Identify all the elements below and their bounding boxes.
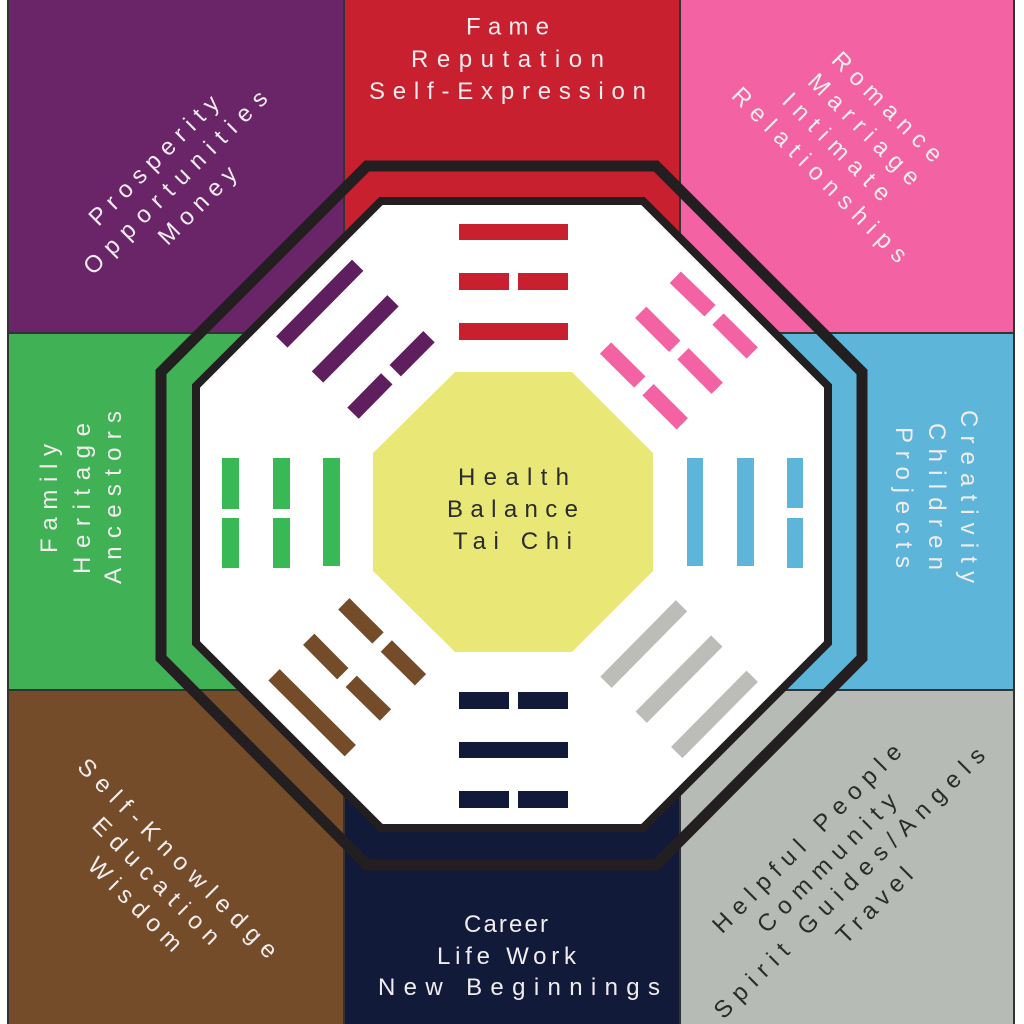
text: family: Ancestors xyxy=(100,411,127,584)
trigram: prosperity xyxy=(282,265,429,413)
text: romance: Intimate xyxy=(777,87,896,207)
text: creativity: Projects xyxy=(890,427,917,568)
trigram: fame xyxy=(459,224,568,340)
trigram: self-knowledge xyxy=(274,604,420,751)
trigram: helpful people xyxy=(606,606,752,752)
text: fame: Fame xyxy=(466,14,549,40)
text: health centre: Health xyxy=(458,464,569,491)
text: helpful people: Travel xyxy=(831,862,919,950)
text: family: Heritage xyxy=(69,423,96,574)
trigram: creativity xyxy=(687,458,803,568)
panel: fame xyxy=(344,0,680,333)
text: self-knowledge: Wisdom xyxy=(82,852,187,957)
text: career: Career xyxy=(464,911,548,938)
text: helpful people: Spirit Guides/Angels xyxy=(709,742,991,1024)
text: fame: Self-Expression xyxy=(369,78,646,105)
text: romance: Relationships xyxy=(726,82,913,269)
text: helpful people: Community xyxy=(752,788,903,939)
text: prosperity: Prosperity xyxy=(83,90,225,231)
text: creativity: Children xyxy=(923,423,950,570)
inner white octagon xyxy=(196,201,828,828)
panel: helpful people xyxy=(680,690,1014,1024)
panel: prosperity xyxy=(8,0,344,333)
text: career: New Beginnings xyxy=(378,974,660,1001)
text: creativity: Creativity xyxy=(955,410,982,583)
text: family xyxy=(36,411,127,584)
text: health centre: Tai Chi xyxy=(453,528,572,555)
text: prosperity: Opportunities xyxy=(78,85,273,280)
trigram: career xyxy=(459,692,568,808)
text: prosperity: Money xyxy=(153,161,243,251)
text: health centre: Balance xyxy=(447,496,578,523)
panel: family xyxy=(8,333,344,690)
text: career xyxy=(378,911,660,1001)
panel: career xyxy=(344,690,680,1024)
text: fame: Reputation xyxy=(411,46,604,73)
panel: self-knowledge xyxy=(8,690,344,1024)
outer octagon outline xyxy=(161,166,862,865)
trigram: family xyxy=(222,458,340,568)
text: romance: Romance xyxy=(826,46,948,168)
text: creativity xyxy=(890,410,982,583)
centre yellow octagon xyxy=(373,372,653,652)
text: family: Family xyxy=(36,444,63,553)
panel: creativity xyxy=(680,333,1014,690)
panel: romance xyxy=(680,0,1014,333)
text: health centre xyxy=(447,464,578,555)
text: self-knowledge: Education xyxy=(87,812,225,950)
text: fame xyxy=(369,14,646,105)
trigram: romance xyxy=(606,277,752,424)
text: career: Life Work xyxy=(437,943,577,970)
text: self-knowledge: Self-Knowledge xyxy=(72,753,283,964)
text: helpful people: Helpful People xyxy=(707,739,907,939)
text: romance: Marriage xyxy=(802,68,925,191)
